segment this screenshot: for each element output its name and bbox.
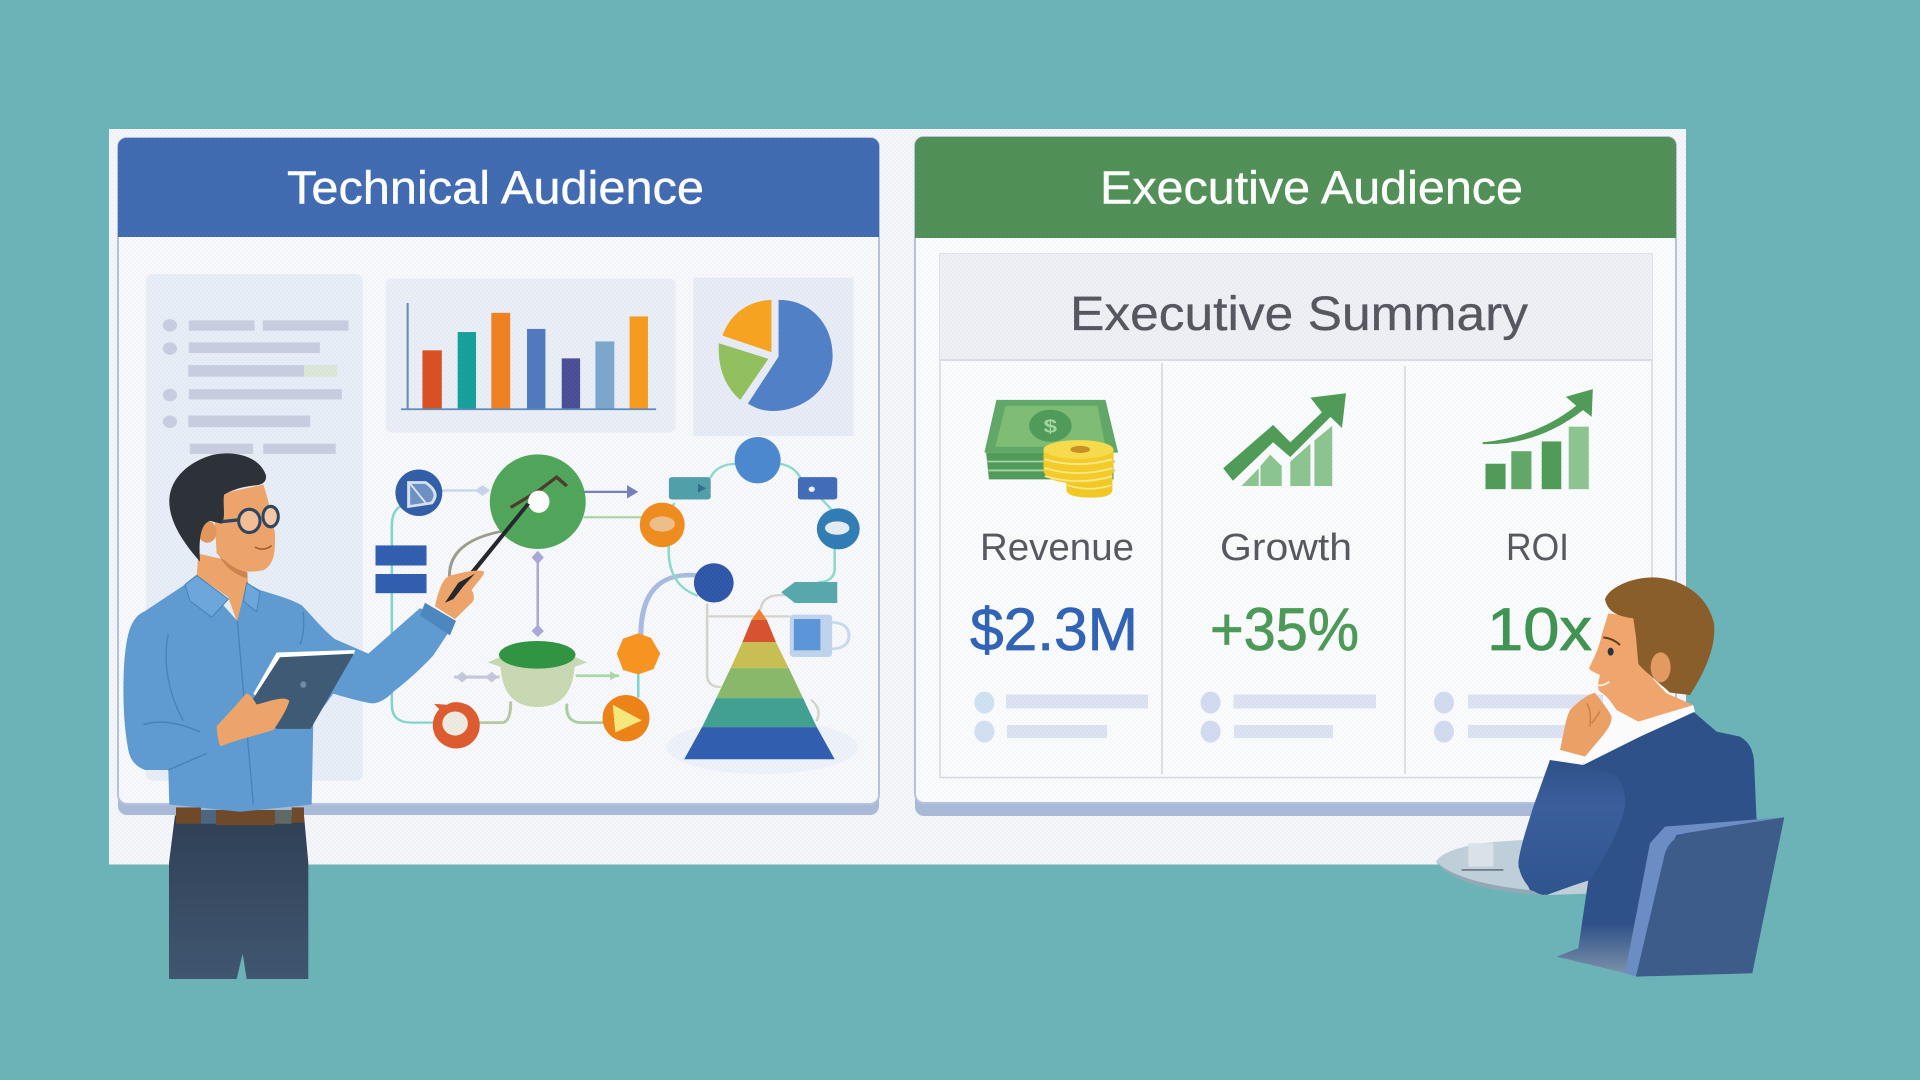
hair (169, 453, 266, 562)
bullet lines (1201, 692, 1376, 743)
executive summary table (940, 254, 1652, 778)
ear (198, 521, 217, 543)
jacket sleeve (1518, 760, 1625, 895)
node: blue ring (817, 508, 860, 549)
label: growth: Growth (1220, 527, 1352, 569)
bar chart (386, 278, 676, 432)
hair (1605, 577, 1714, 695)
arrowheads (456, 485, 638, 682)
collar (185, 575, 260, 617)
node: blue circle (735, 437, 781, 483)
cuff (1550, 750, 1585, 765)
face (213, 485, 275, 572)
bullet lines (1434, 692, 1603, 743)
heading bar: technical audience (118, 138, 879, 237)
mouth (1597, 682, 1609, 685)
presentation screen (109, 129, 1686, 864)
value: growth: +35% (1210, 596, 1359, 663)
holding hand (217, 694, 289, 746)
node: stacked blue bars (376, 545, 427, 593)
technical panel content (146, 274, 860, 781)
node: navy circle (694, 563, 734, 603)
heading bar: executive audience (915, 137, 1676, 238)
table (1436, 840, 1600, 895)
node: orange play (603, 695, 649, 741)
screen texture (109, 129, 1686, 864)
panel: executive audience (915, 137, 1676, 816)
value: revenue: $2.3M (970, 596, 1138, 663)
pyramid (666, 609, 858, 774)
column: revenue (970, 400, 1148, 743)
icon: growth arrow and bars (1223, 393, 1346, 486)
node: teal tag (669, 477, 711, 499)
node: lock (790, 615, 849, 657)
node: green pot (488, 641, 587, 707)
node: green hub (490, 454, 586, 549)
node: orange disc (640, 503, 685, 547)
shirt (123, 575, 455, 812)
document list panel (146, 274, 363, 781)
node: D badge (395, 470, 442, 516)
column: growth (1201, 393, 1376, 743)
label: roi: ROI (1506, 527, 1569, 569)
pie chart (693, 278, 854, 436)
heading bar: executive audience: Executive Audience (1100, 162, 1523, 214)
tablet (248, 650, 355, 729)
icon: money and coins (984, 400, 1118, 498)
pointer grip (445, 574, 475, 603)
neck (197, 554, 248, 623)
ear (1651, 652, 1671, 682)
value: roi: 10x (1487, 596, 1592, 663)
panel: technical audience (118, 138, 879, 815)
fingers (1587, 703, 1600, 727)
jacket (1518, 712, 1757, 977)
icon: roi bars and curve (1483, 389, 1593, 489)
presenter figure (123, 453, 530, 979)
eye (1608, 648, 1614, 656)
node: orange blob (617, 633, 660, 674)
eyebrow (1603, 637, 1620, 645)
pants (169, 815, 308, 979)
face and neck (1589, 613, 1693, 722)
chair (1625, 817, 1784, 977)
icon: money and coins: $ (1044, 415, 1057, 437)
glasses (222, 506, 278, 533)
smile (255, 546, 272, 549)
heading bar: technical audience: Technical Audience (287, 162, 704, 214)
pointing hand (435, 571, 484, 619)
executive figure and table (1436, 577, 1784, 977)
flow diagram (376, 437, 860, 774)
node: blue tag (798, 477, 837, 499)
connectors (392, 464, 835, 723)
neck shadow (218, 554, 247, 578)
subheading: Executive Summary (1070, 288, 1528, 341)
node: teal arrow (781, 582, 837, 603)
bullet lines (974, 692, 1148, 743)
cuff (420, 603, 456, 635)
hand at chin (1560, 693, 1612, 757)
shirt folds (143, 612, 304, 805)
column: roi (1434, 389, 1603, 743)
label: revenue: Revenue (980, 527, 1134, 569)
pointer stick (471, 503, 530, 574)
belt (176, 807, 304, 825)
node: red ring (433, 702, 480, 748)
shirt collar (1583, 705, 1695, 765)
